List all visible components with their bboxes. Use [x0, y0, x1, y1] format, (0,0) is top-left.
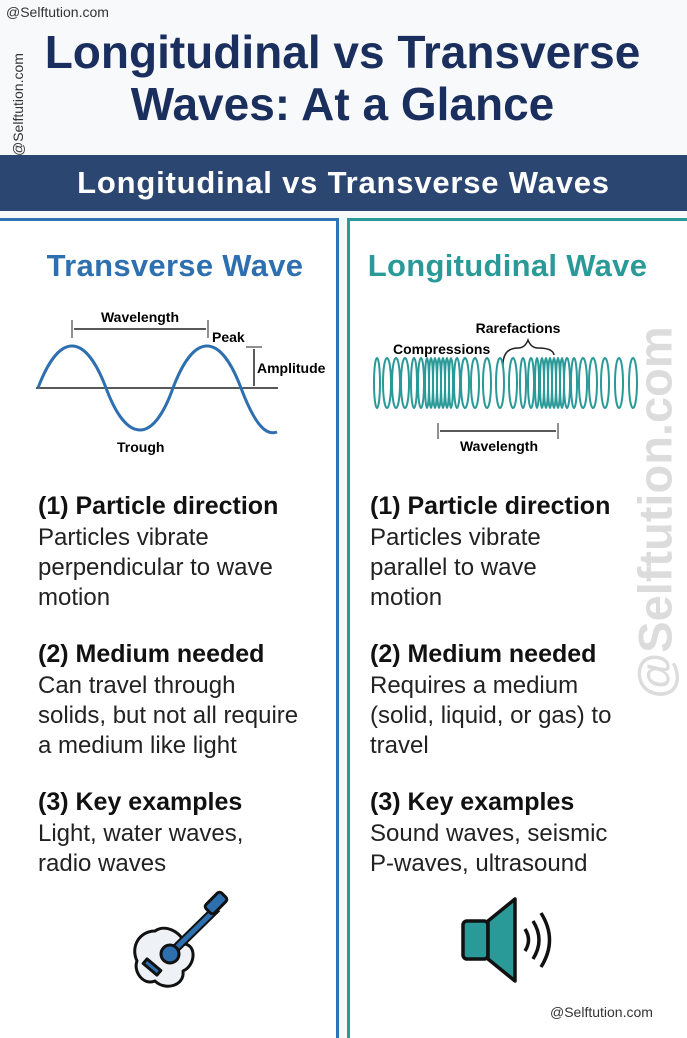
text: longitudinal points: parallel to wave: [370, 554, 537, 581]
diagram: longitudinal wave: Wavelength: [460, 438, 538, 454]
text: longitudinal points: motion: [370, 584, 442, 611]
text: transverse points: (1) Particle direction: [38, 492, 278, 520]
text: transverse points: Light, water waves,: [38, 820, 243, 847]
text: longitudinal points: (3) Key examples: [370, 788, 574, 816]
panel: transverse: [0, 218, 339, 1038]
text: transverse points: motion: [38, 584, 110, 611]
text: transverse points: (2) Medium needed: [38, 640, 264, 668]
text: longitudinal points: (solid, liquid, or gas) to: [370, 702, 611, 729]
heading: longitudinal: Longitudinal Wave: [368, 248, 647, 283]
banner: [0, 155, 687, 211]
text: transverse points: Particles vibrate: [38, 524, 209, 551]
text: longitudinal points: travel: [370, 732, 429, 759]
text: transverse points: Can travel through: [38, 672, 235, 699]
diagram: transverse wave: [36, 309, 326, 455]
title: [45, 26, 640, 130]
diagram: transverse wave: Amplitude: [257, 360, 326, 376]
diagram: longitudinal wave: Compressions: [393, 341, 490, 357]
text: longitudinal points: Particles vibrate: [370, 524, 541, 551]
diagram: transverse wave: Wavelength: [101, 309, 179, 325]
text: longitudinal points: P-waves, ultrasound: [370, 850, 587, 877]
icon: speaker: [461, 897, 552, 983]
icon: guitar: [133, 890, 228, 988]
watermark vertical left: @Selftution.com: [10, 53, 26, 156]
diagram: transverse wave: Peak: [212, 329, 245, 345]
watermark vertical right: @Selftution.com: [628, 326, 682, 699]
text: transverse points: [38, 492, 298, 877]
title: Waves: At a Glance: [131, 78, 554, 130]
text: transverse points: solids, but not all require: [38, 702, 298, 729]
diagram: longitudinal wave: Rarefactions: [476, 320, 561, 336]
heading: transverse: Transverse Wave: [47, 248, 303, 283]
text: longitudinal points: (2) Medium needed: [370, 640, 596, 668]
text: transverse points: perpendicular to wave: [38, 554, 273, 581]
text: transverse points: a medium like light: [38, 732, 237, 759]
text: transverse points: (3) Key examples: [38, 788, 242, 816]
diagram: transverse wave: Trough: [117, 439, 164, 455]
banner: Longitudinal vs Transverse Waves: [77, 165, 610, 200]
text: transverse points: radio waves: [38, 850, 166, 877]
text: longitudinal points: Sound waves, seismic: [370, 820, 607, 847]
watermark top: @Selftution.com: [6, 4, 109, 20]
text: longitudinal points: Requires a medium: [370, 672, 578, 699]
diagram: longitudinal wave: [373, 320, 638, 454]
text: longitudinal points: [370, 492, 611, 877]
title: Longitudinal vs Transverse: [45, 26, 640, 78]
text: longitudinal points: (1) Particle direction: [370, 492, 610, 520]
panel: longitudinal: [347, 218, 687, 1038]
watermark bottom: @Selftution.com: [550, 1004, 653, 1020]
